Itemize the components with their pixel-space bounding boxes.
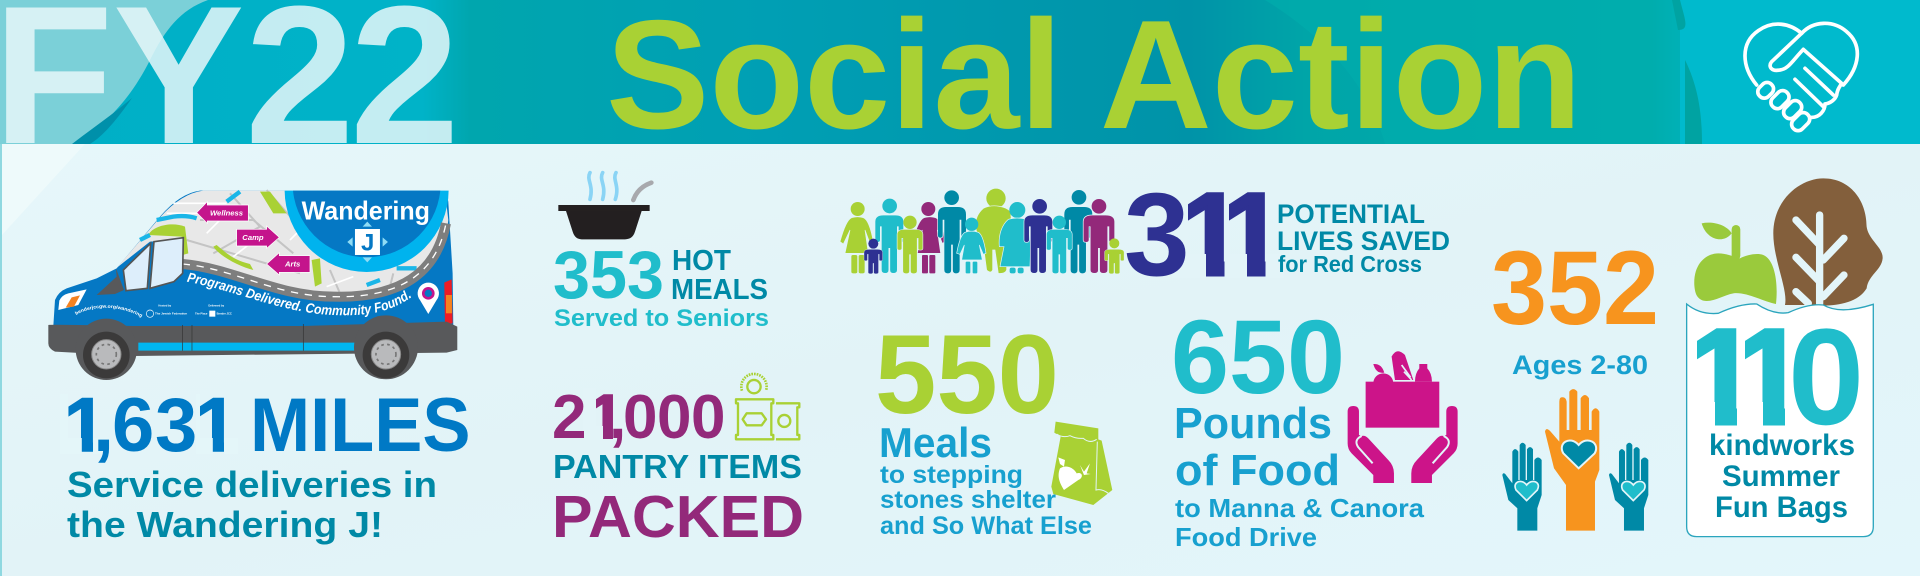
panel: pantry items <box>552 374 804 550</box>
stat text: 21,000 pantry items packed: 1 <box>589 383 623 452</box>
stat text: 550 meals: and So What Else <box>880 512 1092 540</box>
stat text: 311 lives saved <box>1124 169 1450 301</box>
van illustration: Wandering <box>302 195 430 225</box>
stat text: 650 pounds of food: Pounds <box>1174 399 1332 448</box>
stat text: 311 lives saved: POTENTIAL <box>1277 199 1425 229</box>
icon: steaming pot <box>558 173 651 239</box>
stat text: 311 lives saved: 1 <box>1220 169 1285 301</box>
panel: 352 volunteers <box>1491 230 1659 531</box>
stat text: 550 meals: stones shelter <box>880 486 1056 514</box>
stat text: 550 meals: to stepping <box>880 461 1023 489</box>
bag outline <box>1687 304 1873 537</box>
van illustration: J <box>361 230 374 257</box>
icon: cans <box>736 374 799 439</box>
van illustration: Camp <box>242 233 264 242</box>
stat text: 110 kindworks summer fun bags: kindworks <box>1709 429 1855 462</box>
stat text: 353 hot meals: Served to Seniors <box>554 305 769 332</box>
van illustration: Bender JCC <box>217 312 232 316</box>
icon: hands holding grocery box <box>1348 351 1458 483</box>
stat: 1,631 miles: 1 <box>64 383 106 468</box>
stat text: 650 pounds of food: to Manna & Canora <box>1175 493 1425 523</box>
stat text: 353 hot meals: MEALS <box>671 274 768 306</box>
stat text: 110 kindworks summer fun bags <box>1684 301 1864 524</box>
icon: raised hands with hearts <box>1502 389 1648 531</box>
stat text: 353 hot meals <box>553 237 769 332</box>
panel: Wandering J van <box>48 190 471 545</box>
stat text: 650 pounds of food <box>1171 299 1425 552</box>
stat: 1,631 miles <box>60 382 471 545</box>
stat text: 311 lives saved: 3 <box>1124 169 1190 301</box>
stat text: 550 meals <box>875 312 1092 540</box>
van illustration: benderjccgw.org/wandering <box>74 305 142 318</box>
stat text: 21,000 pantry items packed: PANTRY ITEMS <box>553 448 802 485</box>
stat text: 110 kindworks summer fun bags: Fun Bags <box>1715 491 1848 524</box>
stat: 1,631 miles: 1 <box>195 383 237 468</box>
stat: 1,631 miles: Service deliveries in <box>67 464 437 505</box>
stat text: 650 pounds of food: of Food <box>1175 446 1340 495</box>
stat text: 110 kindworks summer fun bags: 11 <box>1684 301 1808 454</box>
panel: blood donors <box>840 169 1450 301</box>
panel: hot meals <box>553 173 769 332</box>
stat text: 550 meals: Meals <box>879 419 992 466</box>
icon: food bag <box>1051 422 1112 505</box>
panel: 650 pounds <box>1171 299 1458 552</box>
stat text: 650 pounds of food: Food Drive <box>1175 522 1317 552</box>
van illustration: Hosted by <box>158 304 172 308</box>
stat text: 311 lives saved: for Red Cross <box>1278 251 1422 277</box>
van illustration: The Jewish Federation <box>155 312 187 316</box>
stat text: 21,000 pantry items packed: 2 <box>552 383 586 452</box>
header banner background <box>0 0 1920 144</box>
icon: handshake heart <box>1745 23 1857 133</box>
stat text: 550 meals: 550 <box>875 312 1059 437</box>
stat text: 21,000 pantry items packed: ,000 <box>609 383 725 452</box>
stat text: 353 hot meals: HOT <box>672 245 731 277</box>
body panel background <box>0 144 1920 576</box>
stat text: 353 hot meals: 353 <box>553 237 664 313</box>
stat text: 311 lives saved: LIVES SAVED <box>1277 226 1450 256</box>
stat text: 110 kindworks summer fun bags: 0 <box>1788 301 1864 454</box>
stat text: 311 lives saved: 1 <box>1179 169 1244 301</box>
van illustration: Delivered by <box>208 304 225 308</box>
stat text: 110 kindworks summer fun bags: Summer <box>1722 460 1840 493</box>
van illustration: Programs Delivered. Community Found. <box>186 272 411 317</box>
van illustration <box>48 190 458 380</box>
stat text: 21,000 pantry items packed <box>552 383 804 550</box>
stat text: 650 pounds of food: 650 <box>1171 299 1345 416</box>
stat: 1,631 miles: the Wandering J! <box>67 504 383 545</box>
stat text: 352 ages 2-80: Ages 2-80 <box>1512 350 1648 380</box>
van illustration: The Place <box>195 312 208 316</box>
icon: apple and leafy green <box>1687 178 1883 537</box>
van illustration: Arts <box>284 260 300 269</box>
van illustration: Wellness <box>210 209 243 218</box>
icon: crowd of people <box>840 189 1124 274</box>
stat text: 21,000 pantry items packed: PACKED <box>552 484 804 550</box>
stat: 1,631 miles: ,63 <box>93 383 197 468</box>
panel: kindworks fun bags <box>1684 178 1883 537</box>
stat: 1,631 miles: MILES <box>250 382 471 467</box>
stat text: 352 ages 2-80: 352 <box>1491 230 1659 347</box>
panel: 550 meals <box>875 312 1112 540</box>
